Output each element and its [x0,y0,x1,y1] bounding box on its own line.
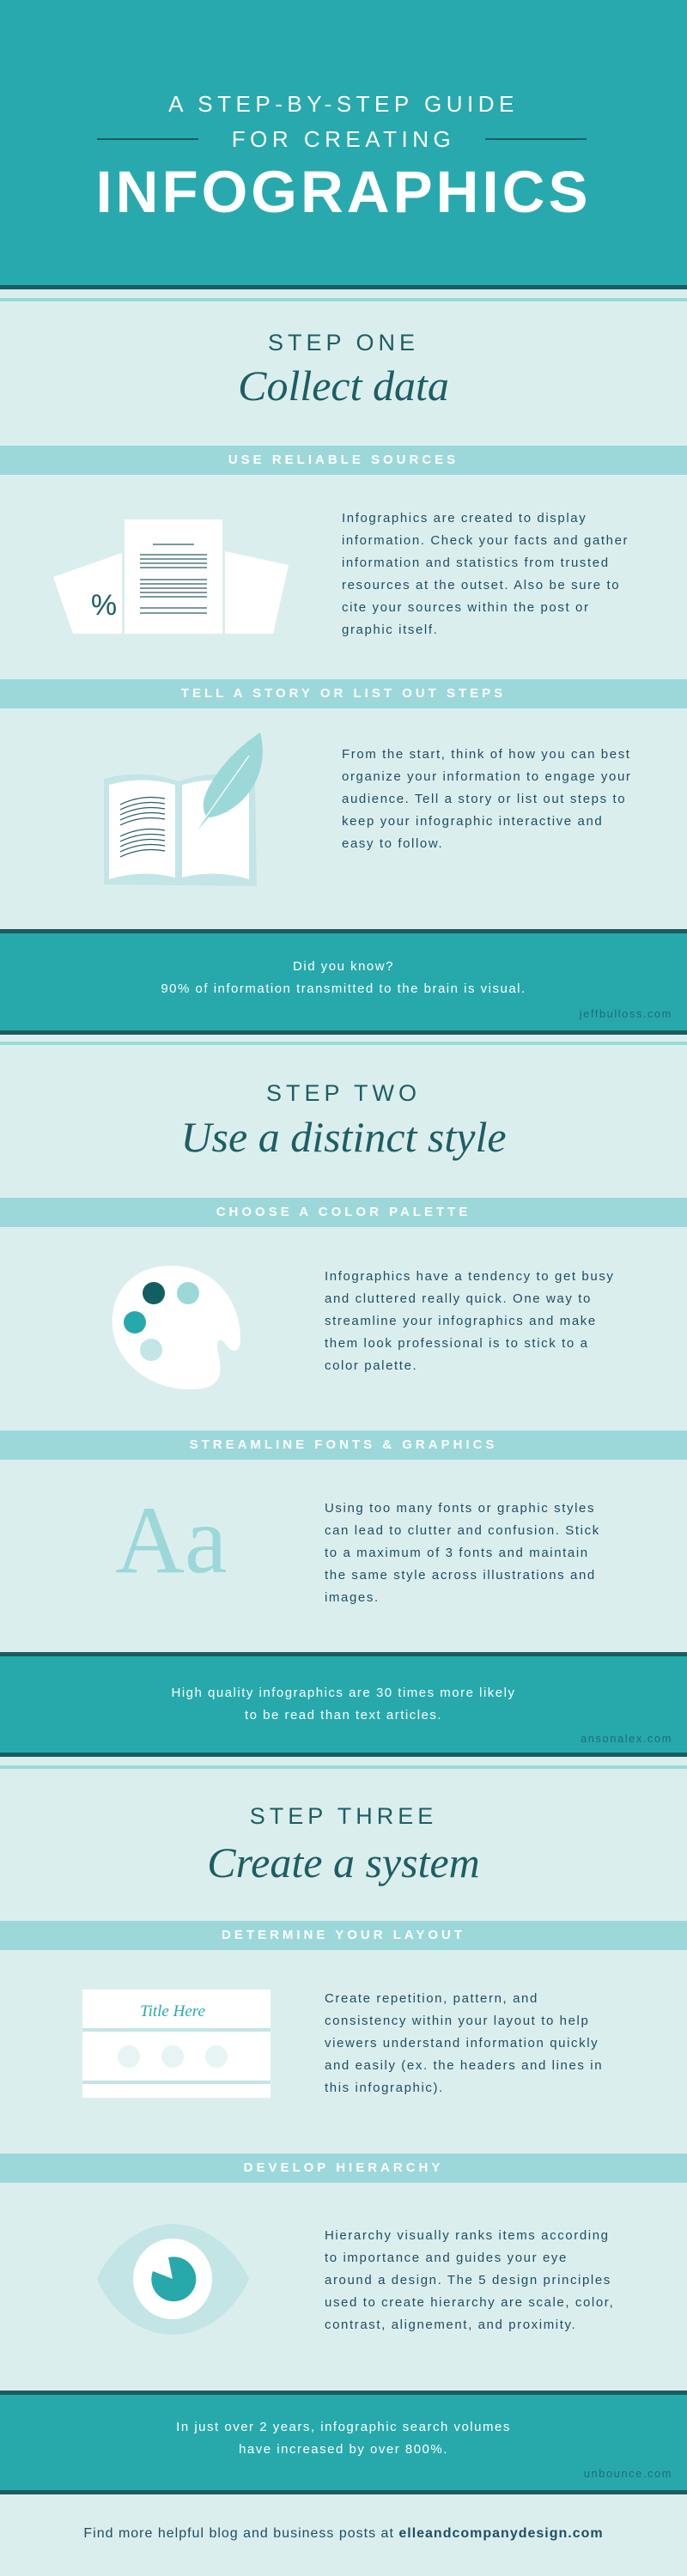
text: hierarchy: Hierarchy visually ranks items according [325,2228,610,2243]
bar: hierarchy: DEVELOP HIERARCHY [244,2160,443,2175]
text: layout: this infographic). [325,2081,444,2095]
text: layout: viewers understand information quickly [325,2036,599,2050]
text: reliable sources: Infographics are created to display [342,511,587,526]
icon: layout: Title Here [140,2002,205,2020]
bar: color palette [0,1198,687,1227]
text: hierarchy: around a design. The 5 design principles [325,2273,611,2287]
step two script title: Use a distinct style [180,1113,507,1161]
bar: fonts: STREAMLINE FONTS & GRAPHICS [190,1437,497,1452]
text: hierarchy [325,2228,614,2332]
subtitle line 2: FOR CREATING [232,126,455,152]
stat box 2: to be read than text articles. [245,1708,442,1722]
bar: fonts [0,1431,687,1460]
stat box 1: 90% of information transmitted to the brain is visual. [161,981,526,996]
bar: tell a story [0,679,687,708]
text: layout [325,1991,603,2095]
text: layout: Create repetition, pattern, and [325,1991,538,2006]
text: tell a story: organize your information to engage your [342,769,632,784]
stat box 2 [0,1652,687,1757]
text: layout: consistency within your layout to help [325,2014,589,2028]
stat box 3 [0,2391,687,2494]
text: tell a story: audience. Tell a story or list out steps to [342,792,626,806]
text: fonts: can lead to clutter and confusion. Stick [325,1523,600,1538]
text: fonts: Using too many fonts or graphic styles [325,1501,595,1516]
text: reliable sources: resources at the outset. Also be sure to [342,578,620,592]
text: reliable sources: information. Check your facts and gather [342,533,629,548]
text: layout: and easily (ex. the headers and lines in [325,2058,603,2073]
text: color palette: color palette. [325,1358,417,1373]
bar: hierarchy [0,2154,687,2183]
text: reliable sources: cite your sources within the post or [342,600,590,615]
text: tell a story [342,747,632,851]
subtitle line 1: A STEP-BY-STEP GUIDE [168,91,519,117]
header [0,0,687,289]
icon: palette [112,1266,240,1389]
stat box 1 [0,929,687,1035]
icon: Aa: Aa [115,1487,228,1594]
bar: use reliable sources [0,446,687,475]
stat box 2: High quality infographics are 30 times more likely [172,1686,515,1700]
text: color palette: them look professional is to stick to a [325,1336,589,1351]
text: color palette: Infographics have a tendency to get busy [325,1269,615,1284]
icon: documents: % [91,589,117,622]
step one heading: STEP ONE [268,330,419,355]
text: tell a story: easy to follow. [342,836,443,851]
source: ansonalex.com [581,1732,672,1745]
bar: layout: DETERMINE YOUR LAYOUT [222,1928,465,1942]
text: reliable sources: graphic itself. [342,623,438,637]
text: tell a story: From the start, think of how you can best [342,747,631,762]
text: fonts: to a maximum of 3 fonts and maintain [325,1546,589,1560]
text: hierarchy: used to create hierarchy are scale, color, [325,2295,614,2310]
source: jeffbulloss.com [580,1007,672,1020]
icon: eye [97,2224,249,2335]
text: fonts: images. [325,1590,380,1605]
step two heading: STEP TWO [266,1080,421,1106]
stat box 3: In just over 2 years, infographic search volumes [176,2420,511,2434]
step one script title: Collect data [238,361,449,410]
bar: use reliable sources: USE RELIABLE SOURCES [228,453,459,467]
text: color palette [325,1269,615,1373]
icon: documents [53,519,289,634]
icon: layout [82,1990,271,2098]
stat box 1: Did you know? [293,959,394,974]
text: reliable sources [342,511,629,637]
step three heading: STEP THREE [250,1803,437,1829]
step three script title: Create a system [207,1838,480,1886]
bar: color palette: CHOOSE A COLOR PALETTE [216,1205,471,1219]
footer: Find more helpful blog and business posts at elleandcompanydesign.com [83,2526,604,2541]
icon: book and feather [104,732,263,886]
text: hierarchy: to importance and guides your eye [325,2251,568,2265]
text: color palette: and cluttered really quick. One way to [325,1291,592,1306]
stat box 3: have increased by over 800%. [239,2442,448,2457]
text: reliable sources: information and statistics from trusted [342,556,610,570]
text: hierarchy: contrast, alignement, and proximity. [325,2318,576,2332]
text: tell a story: keep your infographic interactive and [342,814,603,829]
text: fonts [325,1501,600,1605]
bar: tell a story: TELL A STORY OR LIST OUT STEPS [181,686,506,701]
source: unbounce.com [584,2467,672,2480]
bar: layout [0,1921,687,1950]
text: fonts: the same style across illustrations and [325,1568,596,1583]
text: color palette: streamline your infographics and make [325,1314,597,1328]
title: INFOGRAPHICS [95,159,592,225]
